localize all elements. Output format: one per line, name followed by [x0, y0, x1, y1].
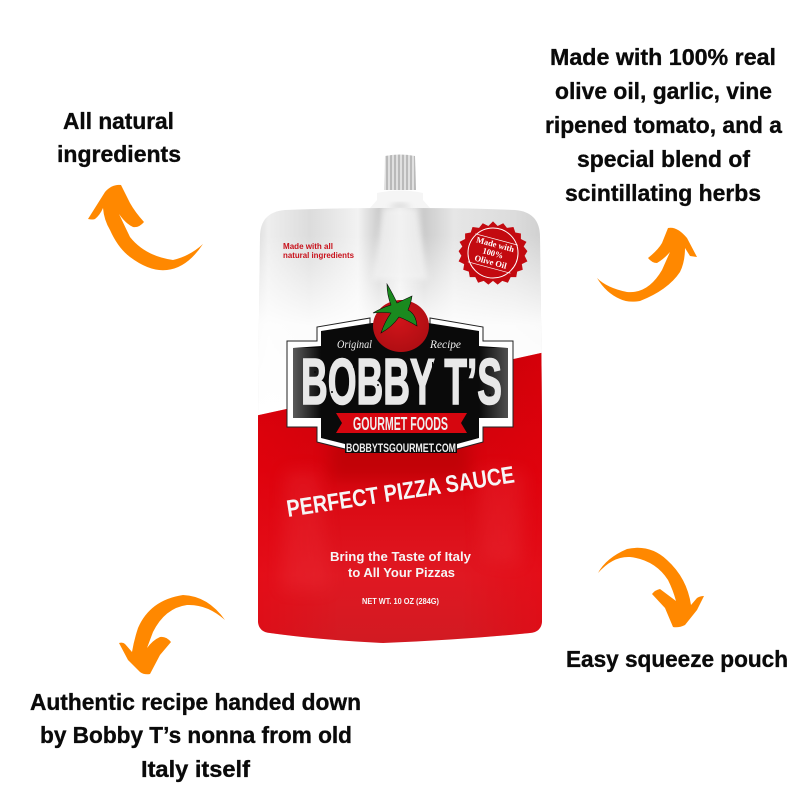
product pouch — [250, 154, 550, 650]
badge: made with 100% olive oil: Made with — [475, 234, 516, 254]
badge: made with 100% olive oil — [459, 221, 527, 285]
logo script: original recipe — [337, 337, 462, 351]
pouch body — [250, 200, 550, 650]
callout: authentic recipe: Authentic recipe handed down — [30, 689, 361, 715]
small claim: made with all natural ingredients: Made with all — [283, 242, 333, 251]
callout: olive oil, garlic, tomato and herbs: olive oil, garlic, vine — [555, 78, 772, 104]
logo url: BOBBYTSGOURMET.COM — [346, 443, 456, 455]
product name: perfect pizza sauce: PERFECT PIZZA SAUCE — [285, 461, 516, 523]
callout: olive oil, garlic, tomato and herbs — [545, 44, 782, 206]
logo: Bobby T's Gourmet Foods — [287, 284, 513, 455]
logo ribbon — [336, 413, 467, 434]
small claim: made with all natural ingredients: natural ingredients — [283, 251, 355, 260]
badge: made with 100% olive oil: Olive Oil — [474, 253, 508, 271]
arrow: bottom right — [598, 548, 704, 627]
icon: tomato — [373, 284, 429, 352]
badge: made with 100% olive oil: 100% — [481, 245, 505, 261]
callout: olive oil, garlic, tomato and herbs: ripened tomato, and a — [545, 112, 782, 138]
arrow: bottom left — [119, 595, 225, 674]
logo ribbon: GOURMET FOODS — [353, 414, 448, 434]
arrow: top left — [88, 185, 203, 270]
tagline: to All Your Pizzas — [348, 565, 455, 580]
logo wordmark: BOBBY T’S — [301, 345, 502, 418]
tagline: Bring the Taste of Italy — [330, 549, 472, 564]
arrow: top right — [597, 228, 697, 302]
logo speckles — [314, 362, 491, 397]
callout: all natural ingredients: ingredients — [57, 141, 181, 167]
callout: authentic recipe — [30, 689, 361, 782]
pouch spout — [370, 154, 430, 208]
callout: olive oil, garlic, tomato and herbs: scintillating herbs — [565, 180, 761, 206]
callout: all natural ingredients — [57, 108, 181, 167]
callout: authentic recipe: Italy itself — [141, 756, 250, 782]
callout: olive oil, garlic, tomato and herbs: Made with 100% real — [550, 44, 776, 70]
callout: authentic recipe: by Bobby T’s nonna from old — [40, 722, 352, 748]
logo script: original recipe: Original — [337, 337, 373, 351]
small claim: made with all natural ingredients — [283, 242, 355, 260]
callout: olive oil, garlic, tomato and herbs: special blend of — [577, 146, 750, 172]
tagline — [330, 549, 472, 580]
callout: easy squeeze pouch: Easy squeeze pouch — [566, 646, 788, 672]
logo script: original recipe: Recipe — [429, 337, 462, 351]
logo frame — [287, 318, 513, 453]
net weight: NET WT. 10 OZ (284G) — [362, 597, 439, 606]
callout: all natural ingredients: All natural — [63, 108, 174, 134]
